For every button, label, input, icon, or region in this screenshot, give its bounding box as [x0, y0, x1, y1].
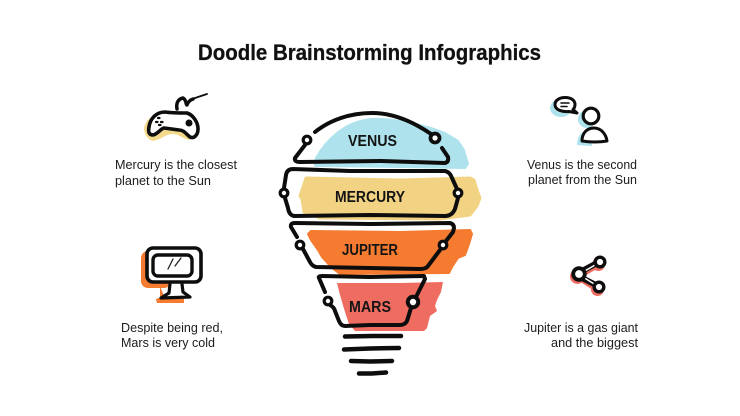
- text: Jupiter: [524, 321, 639, 350]
- text: Jupiter: and the biggest: [551, 336, 639, 350]
- section: Jupiter: [291, 223, 472, 274]
- section: Mars: MARS: [349, 299, 391, 316]
- title: Doodle Brainstorming Infographics: [198, 40, 541, 65]
- text: Venus: Venus is the second: [527, 158, 637, 172]
- text: Mars: [121, 321, 223, 350]
- block: gamepad with Mercury text: [115, 94, 238, 188]
- text: Venus: planet from the Sun: [528, 173, 637, 187]
- section: Mercury: MERCURY: [335, 189, 405, 206]
- block: share with Jupiter text: [524, 257, 639, 350]
- text: Mercury: planet to the Sun: [115, 174, 211, 188]
- text: Mars: Mars is very cold: [121, 336, 215, 350]
- icon: person with speech bubble: [550, 98, 607, 146]
- block: monitor with Mars text: [121, 248, 223, 350]
- light bulb diagram: [280, 113, 480, 374]
- section: Jupiter: JUPITER: [342, 242, 398, 259]
- text: Mercury: Mercury is the closest: [115, 158, 238, 172]
- section: Venus: VENUS: [348, 133, 397, 150]
- text: Mars: Despite being red,: [121, 321, 223, 335]
- bulb base filaments: [344, 336, 401, 374]
- section: Mars: [319, 276, 443, 331]
- icon: game controller: [144, 94, 207, 141]
- text: Jupiter: Jupiter is a gas giant: [524, 321, 639, 335]
- block: people with Venus text: [527, 98, 637, 187]
- section: Venus: [295, 113, 468, 168]
- text: Mercury: [115, 158, 238, 188]
- text: Venus: [527, 158, 637, 187]
- section: Mercury: [280, 169, 480, 219]
- icon: computer monitor: [141, 248, 201, 303]
- icon: share nodes: [570, 257, 605, 296]
